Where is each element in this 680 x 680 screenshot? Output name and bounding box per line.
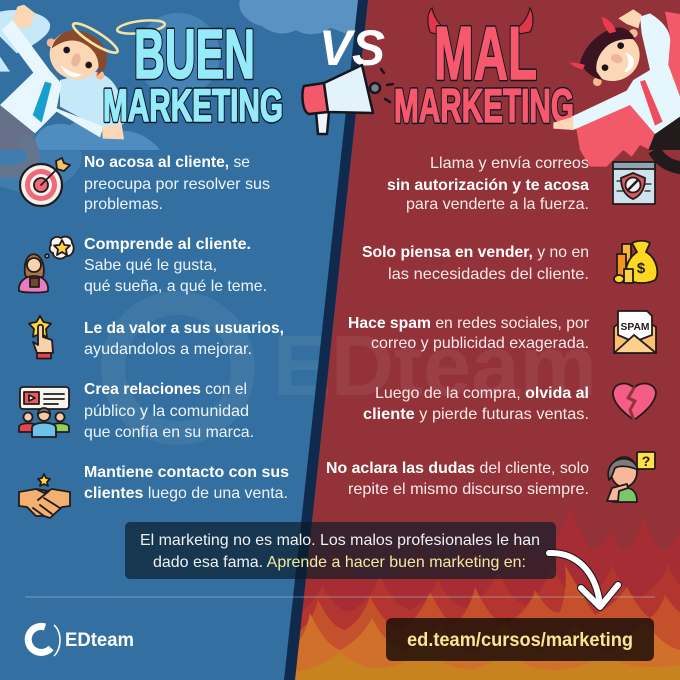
text block: no acosa: No acosa al cliente, se bbox=[84, 154, 250, 171]
text block: no acosa: preocupa por resolver sus bbox=[84, 176, 270, 193]
text block: solo vender: Solo piensa en vender, y no en bbox=[362, 244, 589, 261]
angel hair bbox=[52, 30, 107, 76]
icon: hand and star bbox=[29, 316, 53, 358]
text block: solo vender: las necesidades del cliente. bbox=[388, 266, 589, 283]
icon: confused person: ? bbox=[642, 453, 650, 469]
text block: comprende bbox=[84, 236, 267, 295]
heading: MARKETING right: MARKETING bbox=[394, 79, 574, 132]
text block: dudas: No aclara las dudas del cliente, solo bbox=[326, 460, 589, 477]
angel wings bbox=[0, 10, 50, 72]
heading: VS: VS bbox=[319, 20, 385, 76]
callout: closing message: dado esa fama. Aprende a hacer buen marketing en: bbox=[153, 554, 526, 571]
character: angel bbox=[0, 5, 124, 150]
text block: relaciones: público y la comunidad bbox=[84, 403, 249, 420]
watermark: EDteam logo: EDteam bbox=[273, 319, 597, 414]
icon: target bbox=[20, 158, 70, 206]
heading: BUEN: BUEN bbox=[134, 15, 255, 93]
angel shirt bbox=[0, 20, 103, 137]
devil legs bbox=[648, 117, 680, 150]
callout: closing message bbox=[125, 522, 556, 579]
character: devil bbox=[553, 9, 680, 167]
text block: spam: correo y publicidad exagerada. bbox=[371, 335, 589, 352]
angel tie bbox=[33, 82, 52, 123]
icon: community and video bbox=[19, 387, 69, 437]
text block: sin autorizacion bbox=[387, 155, 589, 213]
heading: MARKETING left bbox=[103, 80, 283, 131]
text block: sin autorizacion: sin autorización y te acosa bbox=[387, 177, 589, 194]
icon: handshake bbox=[19, 474, 70, 518]
flames background bbox=[290, 503, 680, 680]
icon: megaphone bbox=[302, 65, 393, 134]
watermark: EDteam logo bbox=[113, 303, 597, 433]
icon: woman thinking bbox=[19, 237, 74, 292]
devil face bbox=[602, 42, 633, 72]
devil head bbox=[580, 24, 648, 89]
devil hair bbox=[580, 27, 635, 80]
text block: contacto bbox=[84, 464, 289, 502]
icon: spam envelope bbox=[614, 311, 656, 353]
logo: EDteam bbox=[28, 625, 134, 656]
text block: sin autorizacion: Llama y envía correos bbox=[430, 155, 589, 172]
text block: comprende: qué sueña, a qué le teme. bbox=[84, 278, 267, 295]
angel right ear bbox=[96, 71, 104, 80]
angel hands bbox=[13, 5, 35, 28]
panel: mal marketing background bbox=[295, 0, 680, 680]
callout: closing message: El marketing no es malo. Los malos profesionales le han bbox=[140, 532, 540, 549]
icon: blocked browser bbox=[613, 162, 655, 204]
angel ears bbox=[47, 38, 55, 47]
callout: course url: ed.team/cursos/marketing bbox=[407, 630, 633, 651]
devil cape bbox=[574, 12, 680, 167]
devil ears bbox=[593, 29, 638, 86]
text block: relaciones bbox=[84, 381, 254, 441]
heading: MAL bbox=[428, 8, 537, 95]
angel bent leg bbox=[0, 140, 33, 171]
icon: confused person bbox=[607, 452, 655, 502]
arrow: curved to url bbox=[549, 553, 618, 607]
angel face bbox=[61, 47, 92, 77]
angel halo bbox=[70, 19, 121, 57]
text block: da valor: Le da valor a sus usuarios, bbox=[84, 320, 284, 337]
heading: MARKETING left: MARKETING bbox=[103, 80, 283, 131]
heading: MARKETING right bbox=[394, 79, 574, 132]
heading: MAL: MAL bbox=[434, 11, 537, 95]
devil hands bbox=[553, 9, 642, 130]
heading: MAL: MAL bbox=[434, 11, 537, 95]
heading: MARKETING left: MARKETING bbox=[103, 80, 283, 131]
text block: olvida bbox=[363, 385, 589, 423]
text block: dudas: repite el mismo discurso siempre. bbox=[348, 481, 589, 498]
callout: course url bbox=[386, 618, 654, 661]
text block: contacto: clientes luego de una venta. bbox=[84, 485, 288, 502]
text block: no acosa bbox=[84, 154, 270, 213]
logo: EDteam: EDteam bbox=[65, 630, 134, 651]
clouds: left panel bbox=[0, 0, 362, 193]
text block: olvida: Luego de la compra, olvida al bbox=[375, 385, 589, 402]
angel trousers bbox=[0, 105, 37, 150]
text block: comprende: Comprende al cliente. bbox=[84, 236, 251, 253]
heading: BUEN bbox=[116, 15, 255, 93]
icon: broken heart bbox=[613, 383, 656, 420]
icon: spam envelope: SPAM bbox=[620, 321, 650, 333]
panel: buen marketing background bbox=[0, 0, 370, 680]
text block: olvida: cliente y pierde futuras ventas. bbox=[363, 406, 589, 423]
text block: da valor: ayudandolos a mejorar. bbox=[84, 341, 252, 358]
devil horns bbox=[569, 17, 616, 69]
angel head bbox=[42, 23, 109, 88]
heading: BUEN: BUEN bbox=[134, 15, 255, 93]
text block: comprende: Sabe qué le gusta, bbox=[84, 257, 217, 274]
text block: solo vender bbox=[362, 244, 589, 283]
text block: spam: Hace spam en redes sociales, por bbox=[348, 315, 590, 332]
icon: money bag and coins bbox=[614, 241, 657, 283]
devil shirt bbox=[572, 13, 680, 134]
text block: da valor bbox=[84, 320, 284, 358]
text block: dudas bbox=[326, 460, 589, 498]
text block: no acosa: problemas. bbox=[84, 196, 163, 213]
heading: MARKETING right: MARKETING bbox=[394, 79, 574, 132]
icon: money bag and coins: $ bbox=[637, 260, 646, 277]
text block: sin autorizacion: para venderte a la fuerza. bbox=[406, 196, 589, 213]
text block: relaciones: Crea relaciones con el bbox=[84, 381, 247, 398]
devil tie bbox=[640, 80, 663, 126]
divider stripe bbox=[284, 0, 368, 680]
text block: relaciones: que confía en su marca. bbox=[84, 424, 254, 441]
devil leg band bbox=[654, 150, 680, 168]
text block: contacto: Mantiene contacto con sus bbox=[84, 464, 289, 481]
text block: spam bbox=[348, 315, 590, 352]
